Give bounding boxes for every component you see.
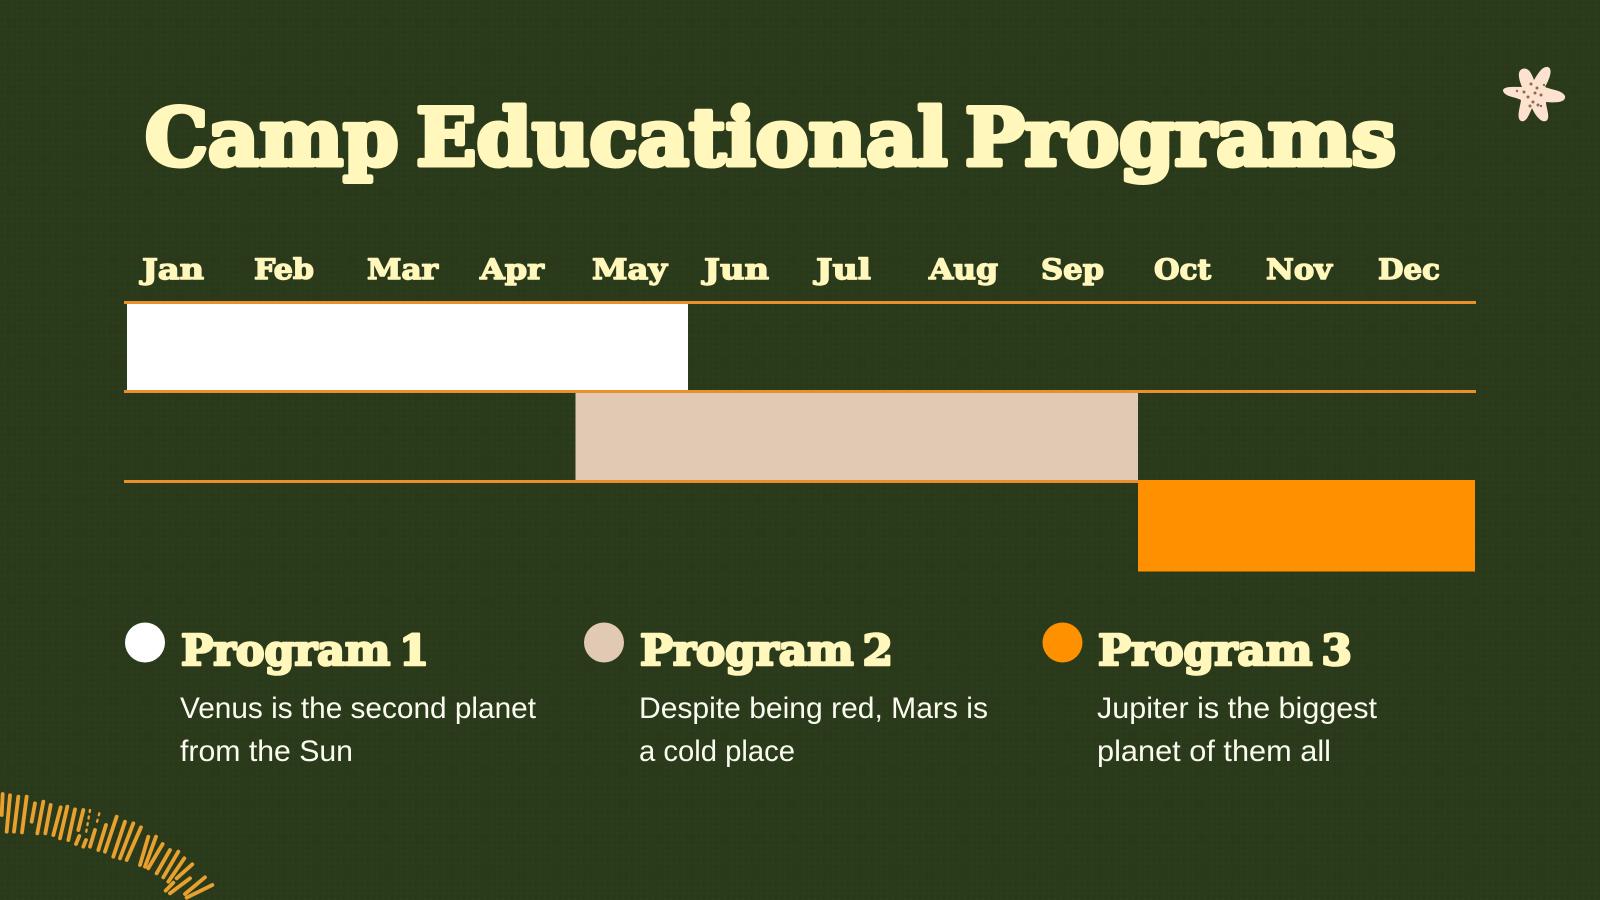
month labels: Dec bbox=[1378, 253, 1440, 286]
month labels: Feb bbox=[254, 253, 314, 286]
text: program 1: Venus is the second planet bbox=[180, 692, 537, 725]
month labels: May bbox=[592, 253, 668, 286]
month labels: Aug bbox=[928, 253, 998, 286]
text: program 3: Jupiter is the biggest bbox=[1097, 692, 1378, 725]
month labels: Nov bbox=[1266, 253, 1333, 286]
heading: program 3: Program 3 bbox=[1098, 626, 1352, 675]
bar: program 2 bbox=[576, 392, 1138, 480]
heading: program 2: Program 2 bbox=[640, 626, 893, 675]
legend: program 1 bbox=[125, 622, 537, 768]
heading: program 1: Program 1 bbox=[181, 626, 429, 675]
dot: program 2 bbox=[584, 622, 624, 662]
decorative arc: hatched orange bbox=[2, 794, 212, 898]
month labels bbox=[138, 253, 1440, 286]
bar: program 1 bbox=[127, 303, 688, 391]
text: program 1: from the Sun bbox=[180, 735, 353, 768]
dot: program 3 bbox=[1042, 622, 1082, 662]
dot: program 1 bbox=[125, 622, 165, 662]
icon: starfish bbox=[1503, 67, 1565, 121]
text: program 2: Despite being red, Mars is bbox=[639, 692, 988, 725]
text: program 3: planet of them all bbox=[1097, 735, 1331, 768]
text: program 2: a cold place bbox=[639, 735, 795, 768]
month labels: Jul bbox=[812, 253, 871, 286]
month labels: Apr bbox=[479, 253, 545, 286]
legend: program 2 bbox=[584, 622, 988, 768]
legend: program 3 bbox=[1042, 622, 1378, 768]
gantt chart bbox=[124, 301, 1476, 572]
title: Camp Educational Programs bbox=[145, 91, 1396, 184]
month labels: Jan bbox=[138, 253, 204, 286]
month labels: Mar bbox=[367, 253, 439, 286]
bar: program 3 bbox=[1138, 480, 1475, 572]
month labels: Sep bbox=[1041, 253, 1104, 286]
month labels: Jun bbox=[700, 253, 769, 286]
month labels: Oct bbox=[1154, 253, 1211, 286]
